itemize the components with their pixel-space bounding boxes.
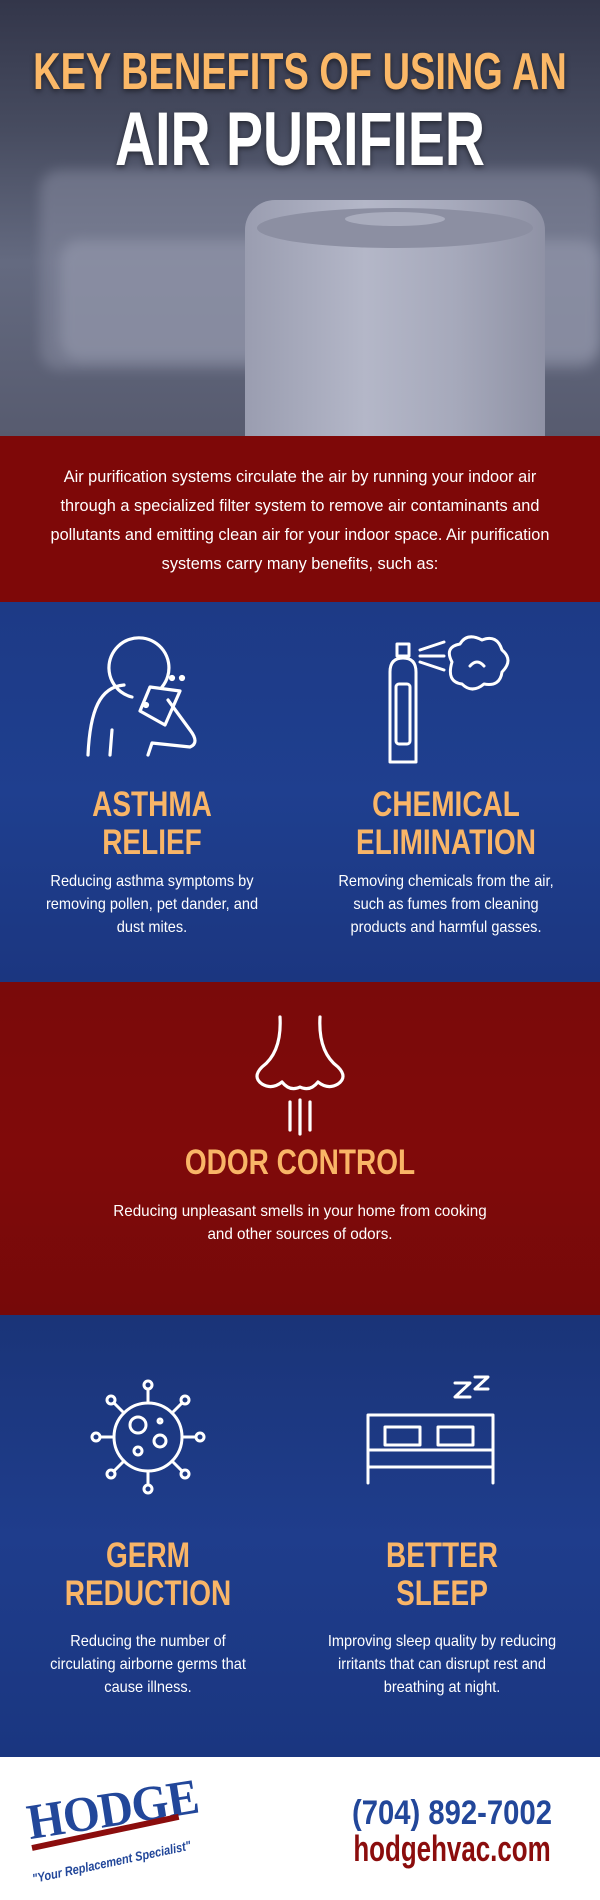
- intro text panel: pollutants and emitting clean air for your indoor space. Air purification: [51, 525, 549, 544]
- intro text panel: through a specialized filter system to remove air contaminants and: [61, 496, 539, 515]
- text: asthma: Reducing asthma symptoms by: [50, 873, 254, 890]
- text: sleep: irritants that can disrupt rest and: [338, 1656, 546, 1673]
- text: sleep: breathing at night.: [384, 1679, 500, 1696]
- icon: bed with zzz: [366, 1376, 494, 1484]
- text: odor: Reducing unpleasant smells in your home from cooking: [113, 1203, 487, 1220]
- footer: [0, 1757, 600, 1900]
- text: asthma: [46, 873, 258, 936]
- air purifier image: [245, 200, 545, 436]
- heading: odor control: ODOR CONTROL: [185, 1143, 415, 1182]
- logo: Hodge: [23, 1768, 202, 1886]
- contact: phone and website: (704) 892-7002: [352, 1794, 552, 1832]
- intro text panel: [0, 436, 600, 602]
- sofa background: [40, 170, 600, 370]
- text: asthma: removing pollen, pet dander, and: [46, 896, 258, 913]
- heading: germ reduction: REDUCTION: [65, 1574, 231, 1613]
- header panel: [0, 0, 600, 436]
- panel: odor control: [0, 982, 600, 1315]
- text: chemical: products and harmful gasses.: [350, 919, 541, 936]
- text: asthma: dust mites.: [117, 919, 187, 936]
- heading: chemical elimination: ELIMINATION: [356, 823, 536, 862]
- heading: better sleep: SLEEP: [396, 1574, 488, 1613]
- logo: Hodge: HODGE: [23, 1768, 202, 1850]
- heading: germ reduction: [65, 1536, 231, 1613]
- text: odor: [113, 1203, 487, 1243]
- heading: better sleep: BETTER: [386, 1536, 498, 1575]
- icon: spray can: [388, 635, 510, 764]
- text: germ: circulating airborne germs that: [50, 1656, 246, 1673]
- intro text panel: systems carry many benefits, such as:: [162, 554, 438, 573]
- text: sleep: Improving sleep quality by reducing: [328, 1633, 556, 1650]
- heading: chemical elimination: CHEMICAL: [372, 785, 520, 824]
- text: odor: and other sources of odors.: [207, 1226, 393, 1243]
- text: sleep: [328, 1633, 556, 1696]
- intro text panel: Air purification systems circulate the air by running your indoor air: [64, 467, 536, 486]
- heading: asthma relief: RELIEF: [102, 823, 202, 862]
- heading: better sleep: [386, 1536, 498, 1613]
- text: chemical: such as fumes from cleaning: [353, 896, 539, 913]
- icon: virus: [90, 1380, 206, 1494]
- text: germ: Reducing the number of: [70, 1633, 226, 1650]
- title: KEY BENEFITS OF USING AN: [33, 43, 567, 101]
- panel: asthma and chemical: [0, 602, 600, 982]
- text: germ: [50, 1633, 246, 1696]
- panel: germs and sleep: [0, 1315, 600, 1757]
- heading: chemical elimination: [356, 785, 536, 862]
- heading: asthma relief: [92, 785, 212, 862]
- icon: person sneezing: [86, 636, 197, 757]
- text: germ: cause illness.: [104, 1679, 192, 1696]
- heading: asthma relief: ASTHMA: [92, 785, 212, 824]
- text: chemical: [338, 873, 554, 936]
- text: chemical: Removing chemicals from the air,: [338, 873, 554, 890]
- contact: phone and website: hodgehvac.com: [353, 1828, 551, 1869]
- contact: phone and website: [352, 1794, 552, 1869]
- logo: Hodge: "Your Replacement Specialist": [31, 1838, 192, 1886]
- title: [33, 43, 567, 182]
- title: AIR PURIFIER: [115, 97, 485, 182]
- icon: nose: [255, 1015, 345, 1136]
- heading: germ reduction: GERM: [106, 1536, 190, 1575]
